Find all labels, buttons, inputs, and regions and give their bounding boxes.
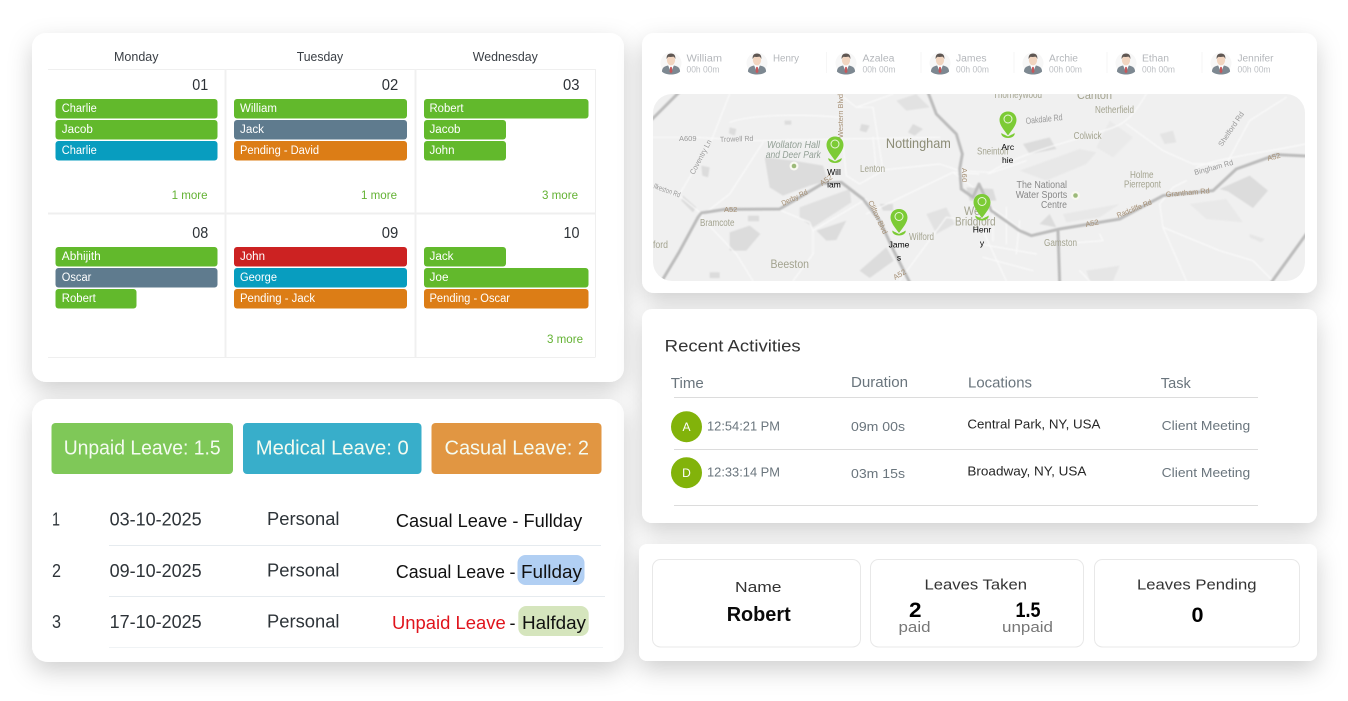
leave row 2: 09-10-2025 xyxy=(110,561,202,581)
map parks xyxy=(790,162,1080,200)
leave row 3: Unpaid Leave xyxy=(392,613,506,633)
calendar cell: 09: John xyxy=(240,251,265,263)
calendar cell: 10: Jack xyxy=(430,251,454,263)
employee: James: James xyxy=(956,54,986,64)
calendar cell: 10 xyxy=(424,225,588,346)
employee: Archie: 00h 00m xyxy=(1049,64,1082,74)
map pin: Henry xyxy=(973,194,991,248)
calendar cell: 01: 1 more xyxy=(172,190,208,202)
map place labels: Holme xyxy=(1130,170,1154,181)
map pin: James: Jame xyxy=(889,240,910,250)
map place labels: Thorneywood xyxy=(993,90,1042,101)
map place labels: Netherfield xyxy=(1095,105,1134,116)
leave row 3: Personal xyxy=(267,612,340,632)
map place labels: We xyxy=(964,204,980,218)
map pin: Archie: Arc xyxy=(1001,142,1015,152)
activity row 1: Central Park, NY, USA xyxy=(967,416,1101,432)
map place labels: Nottingham xyxy=(886,135,951,151)
table header: Duration xyxy=(851,375,908,391)
calendar cell: 03 xyxy=(424,77,588,202)
calendar cell: 10: Pending - Oscar xyxy=(430,293,510,305)
map pin: William: Will xyxy=(827,167,841,177)
leave row 2: Casual Leave xyxy=(396,562,505,582)
panel: recent activities xyxy=(642,309,1317,523)
employee: Archie xyxy=(1022,52,1082,74)
employee: Azalea: 00h 00m xyxy=(862,64,896,74)
map place labels: Centre xyxy=(1041,200,1067,211)
calendar cell: 02: 1 more xyxy=(361,190,397,202)
map road labels xyxy=(652,94,1281,282)
panel: employee leave stats xyxy=(639,544,1317,661)
leave row 3: 3 xyxy=(52,612,61,632)
map road labels: Shelford Rd xyxy=(1216,110,1246,148)
map place labels: Beeston xyxy=(770,257,809,271)
calendar cell: 01: Charlie xyxy=(62,103,97,115)
map place labels: Colwick xyxy=(1074,131,1102,142)
leave row 3: - xyxy=(510,613,516,633)
button: casual leave: Casual Leave: 2 xyxy=(444,438,589,460)
map place labels: Wollaton Hall xyxy=(767,139,821,151)
map pin: Archie: hie xyxy=(1002,155,1014,165)
map pin: Archie xyxy=(1000,112,1016,165)
stat card: name: Name xyxy=(735,579,782,596)
calendar cell: 03: 03 xyxy=(563,77,580,94)
leave row 2 xyxy=(52,555,584,585)
employee: Jennifer: 00h 00m xyxy=(1238,64,1270,74)
map road labels: Grantham Rd xyxy=(1165,186,1210,199)
button: unpaid leave: Unpaid Leave: 1.5 xyxy=(64,438,221,460)
employee: Jennifer: Jennifer xyxy=(1238,54,1274,64)
calendar cell: 08: 08 xyxy=(192,225,208,242)
employee: Ethan: Ethan xyxy=(1142,54,1169,64)
calendar cell: 03: John xyxy=(430,145,454,157)
calendar cell: 02: Jack xyxy=(240,124,264,136)
map pin: James: s xyxy=(897,252,901,262)
leave row 1: 1 xyxy=(52,510,60,530)
stat card: leaves taken: Leaves Taken xyxy=(924,576,1027,594)
employee: James xyxy=(930,52,989,74)
map road labels: A52 xyxy=(1085,217,1099,229)
calendar weekday headings: Monday xyxy=(114,49,159,64)
map place labels xyxy=(653,88,1161,271)
map place labels: Carlton xyxy=(1077,88,1112,102)
employee: James: 00h 00m xyxy=(956,64,989,74)
employee: Azalea: Azalea xyxy=(862,54,895,64)
map road labels: Derby Rd xyxy=(780,187,809,208)
employee: Jennifer xyxy=(1210,52,1274,74)
table header xyxy=(671,375,1192,392)
stat card: leaves taken: paid xyxy=(898,619,930,636)
map xyxy=(651,88,1306,282)
activity row 2: Broadway, NY, USA xyxy=(967,464,1087,478)
calendar cell: 08 xyxy=(56,225,218,308)
table header: Time xyxy=(671,376,704,392)
activity row 2: 12:33:14 PM xyxy=(707,464,780,480)
employee: William: William xyxy=(686,54,722,64)
panel: calendar xyxy=(32,33,624,382)
calendar cell: 02: 02 xyxy=(382,77,398,94)
calendar cell: 02 xyxy=(234,77,407,202)
calendar cell: 03: 3 more xyxy=(542,190,578,202)
map place labels: Bramcote xyxy=(700,218,735,229)
map road labels: Clifton Blvd xyxy=(866,199,890,235)
calendar cell: 01: 01 xyxy=(192,77,208,94)
map place labels: Pierrepont xyxy=(1124,180,1161,190)
map road labels: Oakdale Rd xyxy=(1025,112,1063,126)
button: unpaid leave xyxy=(52,423,233,474)
map pin: Henry: y xyxy=(980,238,985,248)
stat card: leaves taken: unpaid xyxy=(1002,619,1053,636)
map road labels: A609 xyxy=(679,134,697,143)
calendar cell: 08: Oscar xyxy=(62,272,91,284)
employee: Azalea xyxy=(836,52,896,74)
map road labels: A60 xyxy=(960,168,969,183)
map place labels: and Deer Park xyxy=(766,149,821,161)
map place labels: The National xyxy=(1016,180,1067,191)
stat card: name xyxy=(652,560,860,647)
map pin: James xyxy=(889,209,910,262)
calendar cell: 10: Joe xyxy=(430,272,448,284)
map road labels: Western Blvd xyxy=(836,94,845,138)
leave row 1: Personal xyxy=(267,509,340,529)
activity row 1 xyxy=(671,411,1250,442)
calendar cell: 08: Robert xyxy=(62,293,97,305)
panel: leave summary xyxy=(32,399,624,662)
calendar cell: 01 xyxy=(56,77,218,202)
employee: Ethan xyxy=(1116,52,1175,74)
recent activities heading: Recent Activities xyxy=(665,336,801,356)
employee: William xyxy=(660,52,722,74)
activity row 1: Client Meeting xyxy=(1162,418,1250,433)
leave row 3 xyxy=(52,606,589,636)
map place labels: ford xyxy=(653,240,668,251)
calendar cell: 10: 10 xyxy=(564,225,580,242)
table header: Task xyxy=(1161,376,1192,392)
button: medical leave xyxy=(243,423,422,474)
calendar cell: 10: 3 more xyxy=(547,334,583,346)
leave row 1: 03-10-2025 xyxy=(110,510,202,530)
map road labels: A52 xyxy=(724,205,737,214)
activity row 1: A xyxy=(682,420,691,434)
employee: Henry: Henry xyxy=(773,54,799,64)
leave row 2: Personal xyxy=(267,560,340,580)
map road labels: Trowell Rd xyxy=(720,134,754,144)
activity row 2: D xyxy=(682,466,691,480)
map place labels: Sneinton xyxy=(977,146,1008,158)
map road labels: Ilkeston Rd xyxy=(652,181,682,199)
map pin: William: iam xyxy=(827,180,841,190)
calendar cell: 09: 09 xyxy=(382,225,398,242)
activity row 2: Client Meeting xyxy=(1162,465,1250,480)
map road labels: A52 xyxy=(892,267,908,282)
map place labels: Lenton xyxy=(860,164,885,175)
panel: map and employees xyxy=(642,33,1317,293)
calendar weekday headings: Wednesday xyxy=(473,49,538,64)
calendar cell: 09: George xyxy=(240,272,277,284)
map place labels: Water Sports xyxy=(1016,190,1067,201)
stat card: name: Robert xyxy=(727,604,791,626)
employee: William: 00h 00m xyxy=(686,64,720,74)
leave row 3: 17-10-2025 xyxy=(110,612,202,632)
calendar weekday headings xyxy=(114,49,538,64)
stat card: leaves pending: 0 xyxy=(1192,604,1204,627)
leave row 2: 2 xyxy=(52,561,61,581)
map road labels: A52 xyxy=(818,173,834,188)
leave row 1 xyxy=(52,509,582,531)
map road labels: Radcliffe Rd xyxy=(1115,198,1153,220)
calendar cell: 09: Pending - Jack xyxy=(240,293,315,305)
map place labels: Gamston xyxy=(1044,238,1077,249)
table header: Locations xyxy=(968,376,1032,392)
map road labels: Coventry Ln xyxy=(688,138,714,176)
calendar cell: 01: Charlie xyxy=(62,145,97,157)
employee strip xyxy=(660,52,1274,74)
calendar cell: 02: Pending - David xyxy=(240,145,319,157)
activity row 1: 12:54:21 PM xyxy=(707,418,780,434)
map place labels: Wilford xyxy=(909,232,934,243)
map pin: William xyxy=(826,136,844,190)
stat card: leaves taken: 2 xyxy=(909,599,922,622)
leave row 2: Fullday xyxy=(521,562,582,582)
map place labels: Bridgford xyxy=(955,214,996,228)
employee: Archie: Archie xyxy=(1049,54,1078,64)
stat card: leaves taken xyxy=(870,560,1084,647)
stat card: leaves taken: 1.5 xyxy=(1016,599,1041,622)
calendar cell: 03: Jacob xyxy=(430,124,460,136)
button: medical leave: Medical Leave: 0 xyxy=(256,438,409,460)
leave row 3: Halfday xyxy=(522,613,586,633)
activity row 2 xyxy=(671,457,1250,488)
map road labels: Bingham Rd xyxy=(1193,158,1234,177)
employee: Henry xyxy=(746,52,799,74)
button: casual leave xyxy=(432,423,602,474)
leave row 2: - xyxy=(510,562,516,582)
calendar cell: 02: William xyxy=(240,103,277,115)
calendar cell: 09 xyxy=(234,225,407,308)
activity row 2: 03m 15s xyxy=(851,466,906,481)
employee: Ethan: 00h 00m xyxy=(1142,64,1175,74)
activity row 1: 09m 00s xyxy=(851,419,906,434)
calendar cell: 08: Abhijith xyxy=(62,251,101,263)
calendar cell: 01: Jacob xyxy=(62,124,93,136)
stat card: leaves pending xyxy=(1094,560,1300,647)
calendar weekday headings: Tuesday xyxy=(297,49,344,64)
calendar cell: 03: Robert xyxy=(430,103,464,115)
stat card: leaves pending: Leaves Pending xyxy=(1137,576,1256,594)
map pin: Henry: Henr xyxy=(973,224,991,234)
leave row 1: Casual Leave - Fullday xyxy=(396,511,582,531)
map road labels: A52 xyxy=(1266,151,1281,163)
